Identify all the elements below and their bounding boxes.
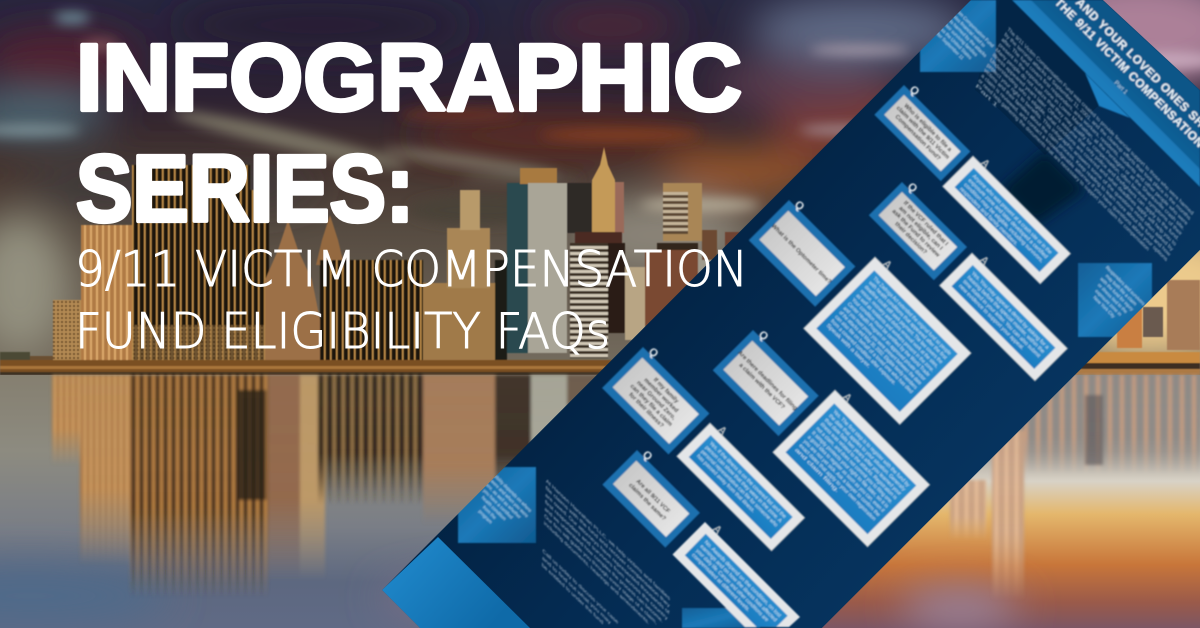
answer box 0: The Zadroga Act extended the original fund so people	[871, 276, 952, 357]
question box 3: member worked	[642, 377, 679, 414]
closing paragraph: file claims with the fund and recover compensation they	[546, 485, 670, 610]
side panel: top: across the United States	[934, 21, 973, 61]
intro paragraph: illness appeared years later. Others assume that only police and firefighters can apply to the fund.	[992, 52, 1180, 243]
side panel: right	[1078, 263, 1152, 337]
side panel: right: or illness tied to the	[1097, 283, 1129, 314]
title: SERIES:	[76, 136, 414, 242]
subtitle: FUND ELIGIBILITY FAQs	[75, 303, 610, 360]
answer box 0: Center Health Program or an approved private doctor	[846, 302, 927, 382]
answer box 1: responders and family members.	[958, 186, 1019, 247]
answer box 5	[672, 522, 800, 627]
answer box 4: illness was related to the attacks. Registration is	[819, 422, 898, 501]
answer box 0: can also file on behalf of a loved one who has died	[833, 314, 914, 395]
answer box 5: earnings and on how the illness has affected	[699, 544, 778, 623]
side panel: right: may both file a claim	[1105, 273, 1138, 307]
background photo: sunset sky	[0, 0, 1200, 376]
poster shadow blob	[1000, 150, 1085, 225]
intro paragraph: present in the exposure zone in Lower Manhattan, at the Pentagon or at the Shanksville crash site.	[997, 42, 1186, 232]
question box 5: Are all 9/11 VCF	[635, 479, 671, 515]
question box 5: claims the same?	[627, 483, 667, 522]
question box 1: claim with the 9/11 Victim	[895, 105, 950, 161]
side panel: bottom	[682, 608, 760, 628]
closing paragraph: first responders and survivors from across the country	[545, 499, 668, 623]
question box 2: am not eligible, can I	[897, 206, 944, 252]
poster content	[458, 0, 1200, 628]
answer box 5: No. Awards depend on the condition, on lost	[703, 540, 782, 619]
background photo: right-side city	[1065, 280, 1200, 375]
question box 1	[874, 84, 971, 182]
answer box 4: you are not yet sick. Ask a lawyer to confirm the	[802, 439, 881, 518]
answer box 4: not a claim, and does not commit you to filing one.	[814, 426, 894, 505]
question box 5: Q	[640, 449, 655, 463]
answer box 0: from a covered condition after exposure.	[829, 319, 897, 386]
answer box 4: and claim filing.	[793, 447, 840, 494]
question box 3: can they file a claim	[629, 384, 673, 428]
closing paragraph	[542, 478, 670, 627]
side panel: lower left: there, as well as whether	[483, 480, 522, 520]
answer box 0: and you must prove you were present between the date	[842, 306, 922, 386]
intro paragraph: Part 1	[974, 83, 999, 110]
answer box 3: A	[715, 424, 729, 438]
poster title band: Part 1	[1113, 80, 1129, 96]
question box 4	[713, 324, 825, 436]
answer box 1: exposure zone and later developed a certified	[967, 178, 1049, 260]
title	[76, 25, 742, 242]
answer box 2: time stated in your letter. You can also submit	[961, 279, 1042, 359]
answer box 4	[773, 384, 936, 547]
question box 3: for their illness?	[627, 392, 665, 429]
intro paragraph: Understanding who is eligible, what conditions are covered and what deadlines apply will help you to	[989, 57, 1177, 248]
answer box 0: of the attacks and May 30, 2002. Eligible family members	[838, 310, 918, 391]
background photo: skyline	[0, 147, 740, 375]
closing paragraph: Call us today to discuss your case	[542, 548, 618, 627]
answer box 4: Yes. The first step is to register with the fund by	[831, 409, 911, 489]
closing paragraph: At Hansen Hanrahan PLLC, we help victims and families	[546, 478, 670, 603]
side panel: top: and their surviving families	[937, 15, 979, 58]
question box 3: Q	[646, 346, 661, 360]
question box 3	[602, 341, 716, 454]
answer box 2: A	[977, 254, 991, 268]
closing paragraph: Our firm will guide you through every stage of a claim,	[544, 513, 657, 627]
answer box 1: A	[978, 157, 992, 171]
answer box 2	[939, 247, 1074, 381]
answer box 4: a good idea to register as soon as you can, even if	[806, 435, 886, 514]
side panel: right: exposure zone in	[1094, 288, 1123, 317]
answer box 3: person can show that they were in the zone. A	[704, 445, 783, 524]
answer box 4: exact dates that apply to your own registration	[798, 443, 877, 522]
question box 2: If the VCF ruled that I	[902, 200, 949, 247]
subtitle	[75, 241, 748, 360]
answer box 3: personal representative can file for someone who	[699, 449, 779, 528]
question box 4: Are there deadlines for filing	[736, 350, 798, 412]
closing paragraph: including documents, hearings and amendments.	[544, 520, 649, 627]
side panel: lower left: you were and when you were	[484, 473, 530, 519]
answer box 0: deadline could still seek payment. The law covers the	[863, 285, 944, 365]
intro paragraph	[974, 27, 1195, 274]
answer box 0: as well as residents and workers present in the zone.	[854, 293, 935, 374]
answer box 0: Speak with a lawyer.	[825, 323, 871, 369]
poster footer band	[382, 537, 530, 628]
side panel: top: individuals harmed by the attacks	[936, 6, 988, 58]
question box 1: Who is eligible to file a	[902, 103, 953, 154]
subtitle: 9/11 VICTIM COMPENSATION	[75, 241, 748, 298]
answer box 4: that date falls two years after you learned your	[823, 418, 902, 497]
infographic poster tilted 45 degrees	[382, 0, 1200, 628]
side panel: right: New York City	[1092, 295, 1117, 319]
closing paragraph: are owed. Our attorneys have represented thousands of	[545, 492, 670, 617]
answer box 2: Yes. You may appeal a denial by asking for a	[970, 271, 1050, 351]
answer box 4: It simply protects your right to file later, so it is	[810, 430, 890, 510]
answer box 5: A	[710, 523, 724, 537]
question box 3: If my family	[652, 377, 680, 405]
side panel: right: Responders and survivors	[1105, 265, 1147, 307]
intro paragraph: protect your right to benefits. This infographic answers some of the questions most often asked by	[986, 62, 1174, 253]
intro paragraph: a claim is reviewed, and contact a knowledgeable attorney if you have questions about your options	[980, 73, 1169, 264]
answer box 1: condition may be eligible, including survivors,	[962, 182, 1044, 264]
side panel: top	[920, 0, 997, 72]
question box 2: ask the Fund to review	[890, 209, 941, 259]
side panel: lower left: Eligibility depends on where	[489, 469, 533, 513]
question box 3: near Ground Zero,	[635, 380, 677, 422]
question box 0	[749, 194, 862, 307]
closing paragraph: and to find out what you may	[542, 555, 611, 627]
side panel: right: with the fund for injury	[1099, 276, 1135, 312]
side panel: lower left: health condition	[481, 495, 507, 522]
side panel: top: after September 11	[934, 29, 965, 61]
poster title band	[1012, 0, 1200, 187]
question box 1: Q	[907, 84, 922, 98]
question box 2	[868, 182, 968, 280]
answer box 5: your daily life. Cancer and other conditions are	[694, 548, 769, 623]
answer box 3: has passed away from that illness.	[695, 453, 756, 514]
answer box 1	[943, 150, 1077, 284]
question box 2: their decision?	[893, 221, 928, 256]
poster intro panel	[976, 23, 1098, 154]
answer box 1: Anyone who was present at a crash site or in the	[971, 174, 1053, 256]
closing paragraph: be entitled to under the fund	[542, 562, 603, 627]
side panel: lower left	[458, 467, 536, 543]
poster body	[382, 0, 1200, 628]
background photo: water with reflections	[0, 375, 1200, 628]
answer box 3: Yes, if the illness is on the covered list and the	[708, 441, 787, 520]
question box 4: Q	[756, 329, 771, 343]
answer box 3	[677, 417, 811, 551]
question box 5	[602, 450, 700, 548]
intro paragraph: or need help gathering the documents that are necessary to support your claim for compensation	[977, 78, 1150, 253]
question box 2: Q	[905, 181, 920, 195]
title: INFOGRAPHIC	[76, 25, 742, 131]
side panel: top: provides financial relief to	[946, 8, 987, 48]
question box 0: What is the Optometer time?	[770, 223, 832, 286]
question box 4: a claim with the VCF?	[737, 363, 786, 411]
answer box 4: the date that applies to your situation. Generally	[827, 413, 907, 493]
answer box 0: A	[880, 258, 894, 272]
answer box 0: Your condition must be certified by the World Trade	[850, 297, 931, 378]
question box 1: Compensation Fund?	[894, 114, 942, 162]
side panel: lower left: from the	[482, 505, 498, 520]
intro paragraph: The 9/11 Victim Compensation Fund was created to provide financial support to those who were harmed	[1006, 27, 1194, 217]
answer box 0: with health conditions that appeared after the first	[867, 280, 948, 361]
side panel: lower left: you have a certified	[482, 488, 514, 520]
answer box 0	[804, 251, 978, 425]
intro paragraph: by the terrorist attacks of September 11, 2001, and the cleanup efforts that took place in the months	[1003, 32, 1192, 222]
closing paragraph: and we understand how complex the process can become.	[544, 506, 663, 625]
answer box 2: new evidence to support your appeal.	[957, 283, 1025, 351]
intro paragraph: Many people do not realize that they may qualify for compensation, often because symptoms of their	[994, 47, 1183, 238]
intro paragraph: victims and their families about the claim process. Keep reading to learn more about the fund and how	[983, 68, 1171, 258]
answer box 2: hearing before the special master, within the	[966, 275, 1046, 355]
answer box 0: rescue, recovery and debris removal work at the sites,	[859, 289, 939, 369]
side panel: top: The Victim Compensation Fund	[946, 0, 995, 48]
question box 0: Q	[792, 199, 807, 213]
answer box 5: compensated at different levels.	[690, 552, 751, 613]
side panel: lower left: program	[478, 509, 493, 525]
intro paragraph: after. The fund covers first responders, area workers, residents, students and other people who were	[1000, 37, 1188, 227]
answer box 4: A	[840, 391, 854, 405]
